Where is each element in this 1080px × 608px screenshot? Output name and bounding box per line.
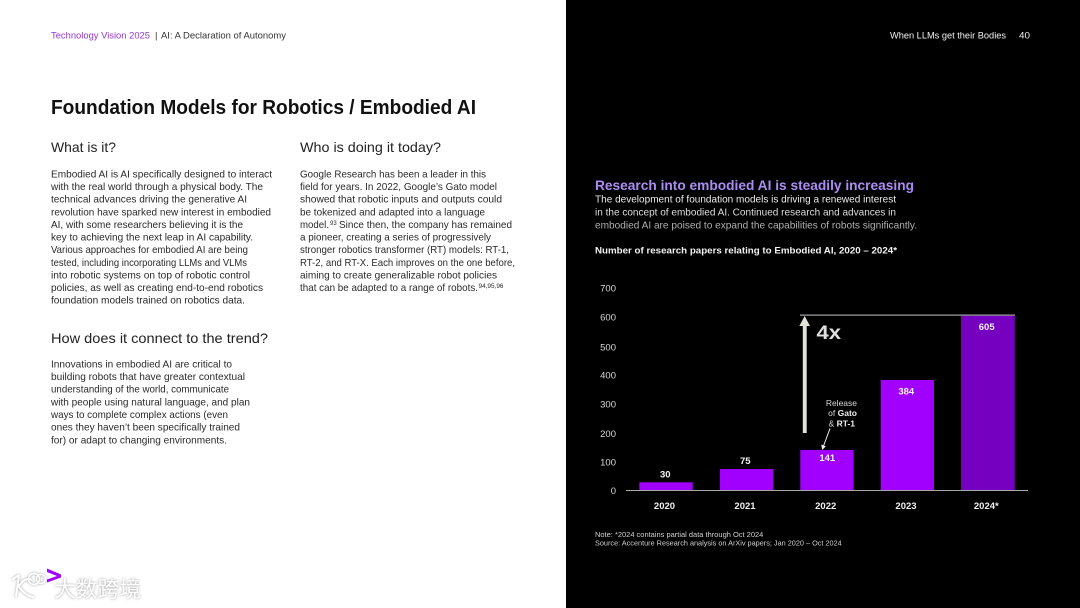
chart heading: Research into embodied AI is steadily increasing <box>595 177 914 193</box>
source note: Source: Accenture Research analysis on ArXiv papers; Jan 2020 – Oct 2024 <box>595 538 842 547</box>
text block: what is it: revolution have sparked new interest in embodied <box>51 207 271 218</box>
text block: who is doing it: field for years. In 2022, Google’s Gato model <box>300 182 497 193</box>
heading: how does it connect: How does it connect to the trend? <box>51 330 268 346</box>
text block: who is doing it: RT-2, and RT-X. Each improves on the one before, <box>300 258 515 269</box>
text block: who is doing it: Since then, the company has remained <box>339 220 512 231</box>
source note <box>595 530 842 547</box>
text block: who is doing it <box>300 170 515 294</box>
year labels: 2023 <box>895 501 917 512</box>
callout: 4x: 4x <box>816 323 841 344</box>
y axis labels <box>600 284 616 497</box>
title: Foundation Models for Robotics / Embodied AI <box>51 97 476 119</box>
source note: Note: *2024 contains partial data through Oct 2024 <box>595 530 763 539</box>
callout: release of Gato and RT-1: Release <box>826 398 857 408</box>
header: section name and page number: 40 <box>1019 30 1030 42</box>
chart description <box>595 194 917 231</box>
heading: who is doing it: Who is doing it today? <box>300 139 441 155</box>
text block: how does it connect: Innovations in embodied AI are critical to <box>51 360 232 370</box>
header: report name: AI: A Declaration of Autonomy <box>161 30 286 42</box>
text block: how does it connect: ones they haven’t been specifically trained <box>51 423 240 434</box>
text block: how does it connect: understanding of the world, communicate <box>51 385 229 396</box>
value labels <box>660 322 995 480</box>
callout: release of Gato and RT-1: of Gato <box>828 408 857 418</box>
heading: what is it: What is it? <box>51 139 116 155</box>
text block: how does it connect: building robots that have greater contextual <box>51 372 245 383</box>
y axis labels: 700 <box>600 284 616 295</box>
header: report name: Technology Vision 2025 <box>51 30 150 42</box>
year labels: 2021 <box>734 501 756 512</box>
chart description: in the concept of embodied AI. Continued research and advances in <box>595 207 896 218</box>
chart description: The development of foundation models is driving a renewed interest <box>595 194 896 206</box>
arrow: pointer to 2022 bar <box>821 428 830 450</box>
y axis labels: 600 <box>600 312 616 324</box>
text block: who is doing it: stronger robotics transformer (RT) models: RT-1, <box>300 245 509 256</box>
watermark: logo and Chinese text: 大数跨境 <box>54 577 141 602</box>
value labels: 384 <box>898 386 915 398</box>
panel: left white article <box>0 0 566 608</box>
panel: right black chart panel <box>566 0 1080 608</box>
text block: who is doing it: 93 <box>330 221 337 227</box>
y axis labels: 400 <box>600 371 616 382</box>
x axis line <box>626 490 1028 491</box>
text block: who is doing it: model. <box>300 220 329 231</box>
text block: what is it: technical advances driving the generative AI <box>51 195 247 206</box>
text block: who is doing it: aiming to create generalizable robot policies <box>300 270 497 281</box>
text block: what is it: Embodied AI is AI specifically designed to interact <box>51 170 272 180</box>
text block: what is it: key to achieving the next leap in AI capability. <box>51 233 253 244</box>
y axis labels: 100 <box>600 458 616 468</box>
chart description: embodied AI are poised to expand the capabilities of robots significantly. <box>595 220 917 231</box>
arrow: 4x growth <box>799 316 810 433</box>
header: report name <box>51 30 286 42</box>
text block: who is doing it: that can be adapted to a range of robots. <box>300 283 478 294</box>
bar chart <box>600 284 1028 512</box>
watermark: logo and Chinese text <box>13 568 141 602</box>
text block: what is it: Various approaches for embodied AI are being <box>51 245 248 256</box>
text block: what is it: with the real world through a physical body. The <box>50 182 263 193</box>
y axis labels: 0 <box>611 486 616 497</box>
text block: what is it <box>50 170 272 307</box>
year labels <box>654 501 999 512</box>
text block: what is it: into robotic systems on top of robotic control <box>51 270 250 281</box>
text block: who is doing it: a pioneer, creating a series of progressively <box>300 233 492 244</box>
text block: who is doing it: be tokenized and adapted into a language <box>300 207 485 218</box>
text block: how does it connect <box>50 360 250 446</box>
text block: who is doing it: Google Research has been a leader in this <box>300 170 486 180</box>
bars <box>639 316 1015 490</box>
text block: how does it connect: for) or adapt to changing environments. <box>51 435 227 446</box>
text block: what is it: tested, including incorporating LLMs and VLMs <box>51 258 247 269</box>
value labels: 30 <box>660 470 671 480</box>
y axis labels: 200 <box>600 429 616 440</box>
text block: who is doing it: 94,95,96 <box>478 284 504 290</box>
y axis labels: 500 <box>600 342 616 353</box>
value labels: 141 <box>819 453 836 464</box>
text block: how does it connect: ways to complete complex actions (even <box>50 410 228 421</box>
year labels: 2020 <box>654 501 675 512</box>
callout: release of Gato and RT-1: & RT-1 <box>829 418 855 428</box>
text block: what is it: foundation models trained on robotics data. <box>51 296 245 307</box>
text block: what is it: AI, with some researchers believing it is the <box>51 220 243 231</box>
value labels: 75 <box>740 456 751 467</box>
callout: release of Gato and RT-1 <box>826 398 857 428</box>
text block: what is it: policies, as well as creating end-to-end robotics <box>51 283 263 294</box>
y axis labels: 300 <box>600 399 616 410</box>
value labels: 605 <box>979 322 995 333</box>
year labels: 2022 <box>815 501 836 512</box>
year labels: 2024* <box>974 501 999 512</box>
text block: who is doing it: showed that robotic inputs and outputs could <box>300 195 502 206</box>
header: report name: | <box>155 30 157 42</box>
header: section name and page number: When LLMs get their Bodies <box>890 30 1006 42</box>
reference line at 2024 value <box>800 314 1015 316</box>
text block: how does it connect: with people using natural language, and plan <box>50 397 250 408</box>
chart title: Number of research papers relating to Embodied AI, 2020 – 2024* <box>595 245 897 256</box>
